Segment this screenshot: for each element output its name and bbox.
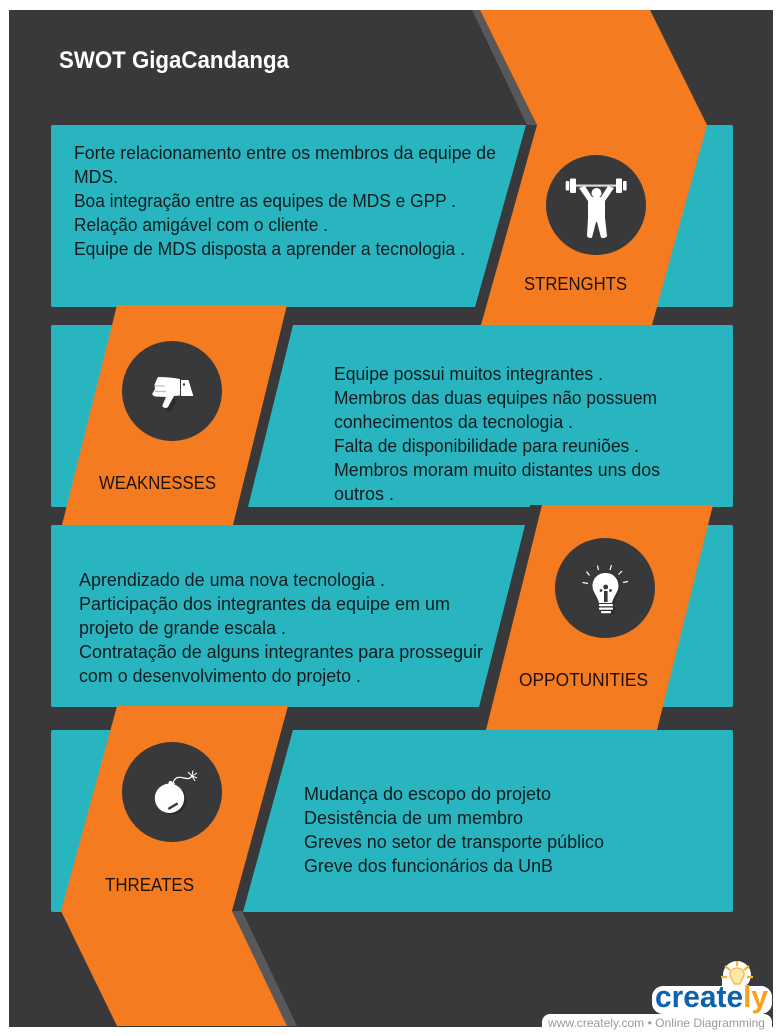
gap above opportunities ribbon	[530, 505, 545, 507]
orange ribbon: threats	[61, 706, 288, 1026]
text: weaknesses list: Falta de disponibilidade para reuniões .	[334, 436, 639, 456]
text: weaknesses list: conhecimentos da tecnologia .	[334, 412, 573, 432]
orange ribbon: strengths	[480, 10, 707, 325]
creately logo: www.creately.com • Online Diagramming	[547, 1016, 765, 1030]
text: weaknesses list: Equipe possui muitos integrantes .	[334, 364, 603, 384]
panel: opportunities background	[51, 525, 733, 707]
panel: threats background	[51, 730, 733, 912]
label: weaknesses: WEAKNESSES	[99, 473, 216, 493]
orange ribbon: opportunities	[486, 505, 713, 730]
text: opportunities list: projeto de grande escala .	[79, 618, 286, 638]
text: threats list: Greves no setor de transporte público	[304, 832, 604, 852]
panel: weaknesses background	[51, 325, 733, 507]
text: opportunities list: Participação dos integrantes da equipe em um	[79, 594, 450, 614]
icon: light bulb	[555, 538, 655, 638]
text: strengths list: Relação amigável com o cliente .	[74, 215, 328, 235]
icon: thumbs down	[122, 341, 222, 441]
text: strengths list: Equipe de MDS disposta a aprender a tecnologia .	[74, 239, 465, 259]
text: opportunities list: Aprendizado de uma nova tecnologia .	[79, 570, 385, 590]
label: opportunities: OPPOTUNITIES	[519, 670, 648, 690]
text: threats list: Greve dos funcionários da UnB	[304, 856, 553, 876]
fold shadow: top strip	[472, 10, 537, 125]
text: weaknesses list: Membros moram muito distantes uns dos	[334, 460, 660, 480]
text: strengths list	[74, 143, 496, 259]
label: strengths: STRENGHTS	[524, 274, 627, 294]
label: threats: THREATES	[105, 875, 194, 895]
text: strengths list: Boa integração entre as equipes de MDS e GPP .	[74, 191, 456, 211]
title: SWOT GigaCandanga	[59, 47, 289, 74]
text: strengths list: Forte relacionamento entre os membros da equipe de	[74, 143, 496, 163]
text: threats list: Desistência de um membro	[304, 808, 523, 828]
text: weaknesses list: outros .	[334, 484, 394, 504]
icon: weightlifter	[546, 155, 646, 255]
text: opportunities list: Contratação de alguns integrantes para prosseguir	[79, 642, 483, 662]
text: strengths list: MDS.	[74, 167, 118, 187]
text: weaknesses list	[334, 364, 660, 504]
text: weaknesses list: Membros das duas equipes não possuem	[334, 388, 657, 408]
icon: bomb	[122, 742, 222, 842]
text: opportunities list	[79, 570, 483, 686]
fold shadow: bottom strip	[232, 911, 297, 1026]
text: threats list: Mudança do escopo do projeto	[304, 784, 551, 804]
creately logo	[0, 961, 780, 1036]
orange ribbon: weaknesses	[62, 305, 287, 525]
text: threats list	[304, 784, 604, 876]
text: opportunities list: com o desenvolvimento do projeto .	[79, 666, 361, 686]
creately logo: creately	[655, 979, 769, 1014]
panel: strengths background	[51, 125, 733, 307]
